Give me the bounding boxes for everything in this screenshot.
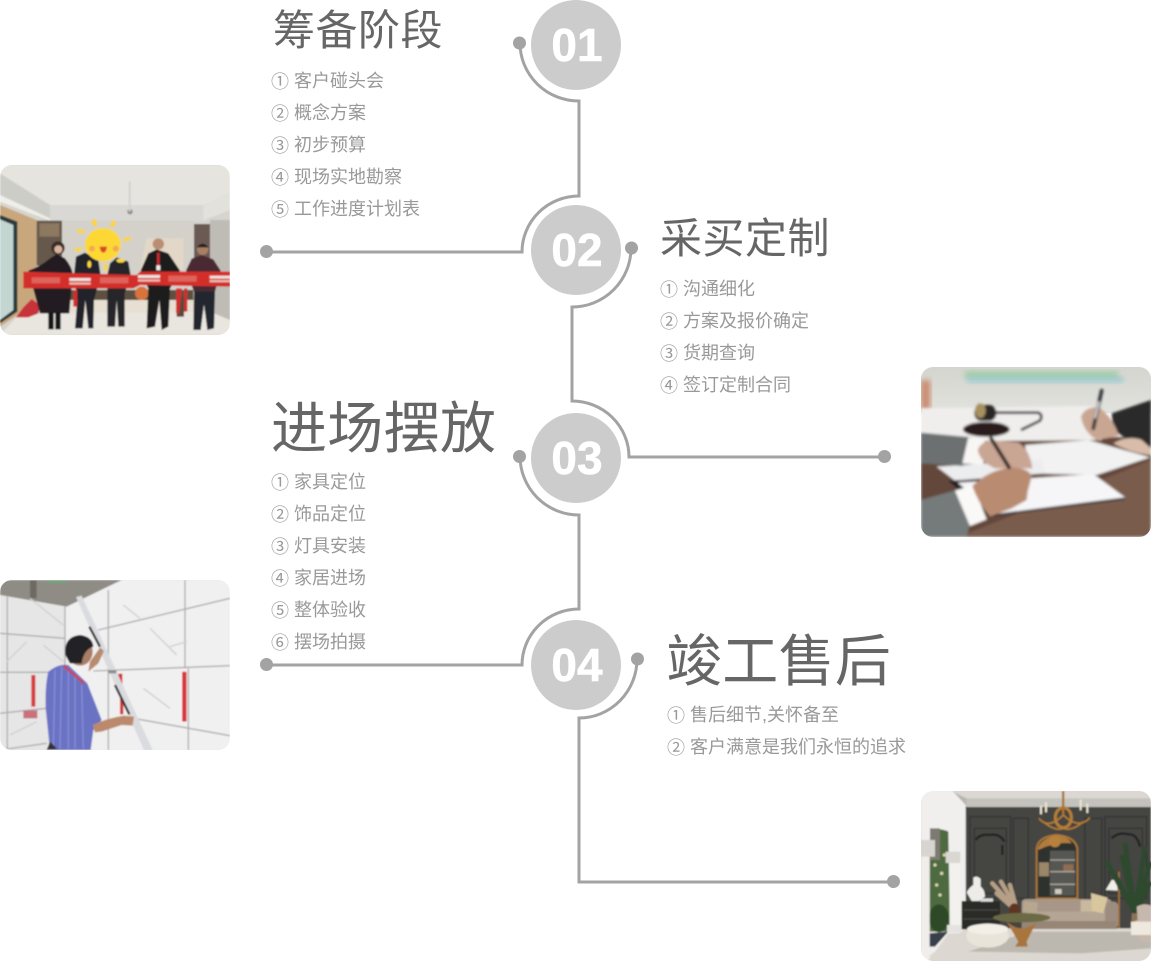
heading: step 02: 采买定制 <box>660 215 830 262</box>
table and ottoman <box>993 913 1050 922</box>
list: step 01 items: 客户碰头会 <box>294 71 384 91</box>
red tape <box>31 675 35 707</box>
list: step 03 items: ③ <box>271 537 289 557</box>
list: step 04 items: ① <box>667 706 685 726</box>
list: step 03 items: ⑤ <box>271 601 289 621</box>
list: step 01 items: ③ <box>271 136 289 156</box>
list: step 03 items: ⑥ <box>271 633 289 653</box>
number badge 01: 01 <box>551 19 603 71</box>
panels <box>970 817 1147 898</box>
heading: step 01: 筹备阶段 <box>273 7 443 54</box>
mirror and shelf <box>1037 835 1077 898</box>
heading: step 04: 竣工售后 <box>666 630 891 693</box>
number badge 04: 04 <box>551 639 603 691</box>
list: step 02 items: ③ <box>660 344 678 364</box>
sun sticker <box>85 228 121 261</box>
list: step 02 items: 签订定制合同 <box>683 375 791 395</box>
list: step 02 items: 沟通细化 <box>683 279 755 299</box>
heading: step 03: 进场摆放 <box>271 397 496 460</box>
list: step 04 items: 客户满意是我们永恒的追求 <box>690 737 906 757</box>
list: step 02 items: 货期查询 <box>683 343 755 363</box>
right hand and sleeve <box>1112 400 1151 448</box>
people <box>28 254 73 313</box>
number badge 03: 03 <box>551 432 603 484</box>
ribbon <box>23 272 230 288</box>
number badge 04 <box>531 620 621 710</box>
photo: opening ceremony with red ribbon <box>0 165 230 335</box>
list: step 04 items: 售后细节,关怀备至 <box>690 705 839 725</box>
list: step 01 items: 现场实地勘察 <box>294 167 402 187</box>
pampas vase <box>992 882 1015 907</box>
list: step 01 items: 初步预算 <box>294 135 366 155</box>
list: step 01 items: ② <box>271 104 289 124</box>
hands <box>978 441 1032 468</box>
list: step 01 items <box>271 71 420 220</box>
list: step 02 items: ① <box>660 280 678 300</box>
list: step 01 items: 概念方案 <box>294 103 366 123</box>
list: step 03 items: 饰品定位 <box>294 504 366 524</box>
photo: hands signing a contract with gavel <box>921 367 1151 537</box>
gavel <box>963 422 1010 437</box>
side cabinet with bust <box>962 901 1000 929</box>
list: step 01 items: 工作进度计划表 <box>294 199 420 219</box>
list: step 02 items <box>660 279 809 396</box>
lamp and plant <box>1116 872 1122 928</box>
list: step 03 items: 灯具安装 <box>294 536 366 556</box>
number badge 01 <box>531 0 621 90</box>
list: step 03 items: 家具定位 <box>294 472 366 492</box>
list: step 03 items <box>271 472 366 653</box>
list: step 02 items: ④ <box>660 376 678 396</box>
level tool <box>76 596 153 750</box>
list: step 01 items: ④ <box>271 168 289 188</box>
floor <box>929 930 1151 961</box>
photo: luxury living room with chandelier <box>921 791 1151 961</box>
list: step 03 items: 整体验收 <box>294 600 366 620</box>
list: step 01 items: ⑤ <box>271 200 289 220</box>
number badge 02: 02 <box>551 224 603 276</box>
papers <box>1025 440 1150 475</box>
list: step 03 items: ② <box>271 505 289 525</box>
list: step 03 items: ④ <box>271 569 289 589</box>
list: step 02 items: ② <box>660 312 678 332</box>
photo: worker checking wall tiles with a level <box>0 580 230 750</box>
list: step 02 items: 方案及报价确定 <box>683 311 809 331</box>
list: step 03 items: 摆场拍摄 <box>294 632 366 652</box>
left sleeves <box>921 433 972 466</box>
number badge 02 <box>531 205 621 295</box>
list: step 01 items: ① <box>271 72 289 92</box>
man <box>46 665 102 750</box>
pen <box>991 438 1009 467</box>
number badge 03 <box>531 413 621 503</box>
list: step 04 items <box>667 705 906 758</box>
list: step 03 items: ① <box>271 473 289 493</box>
armchair <box>1132 904 1151 942</box>
list: step 03 items: 家居进场 <box>294 568 366 588</box>
chandelier <box>1039 815 1090 829</box>
list: step 04 items: ② <box>667 738 685 758</box>
archway and garden <box>930 829 950 932</box>
sofa <box>1022 899 1112 919</box>
